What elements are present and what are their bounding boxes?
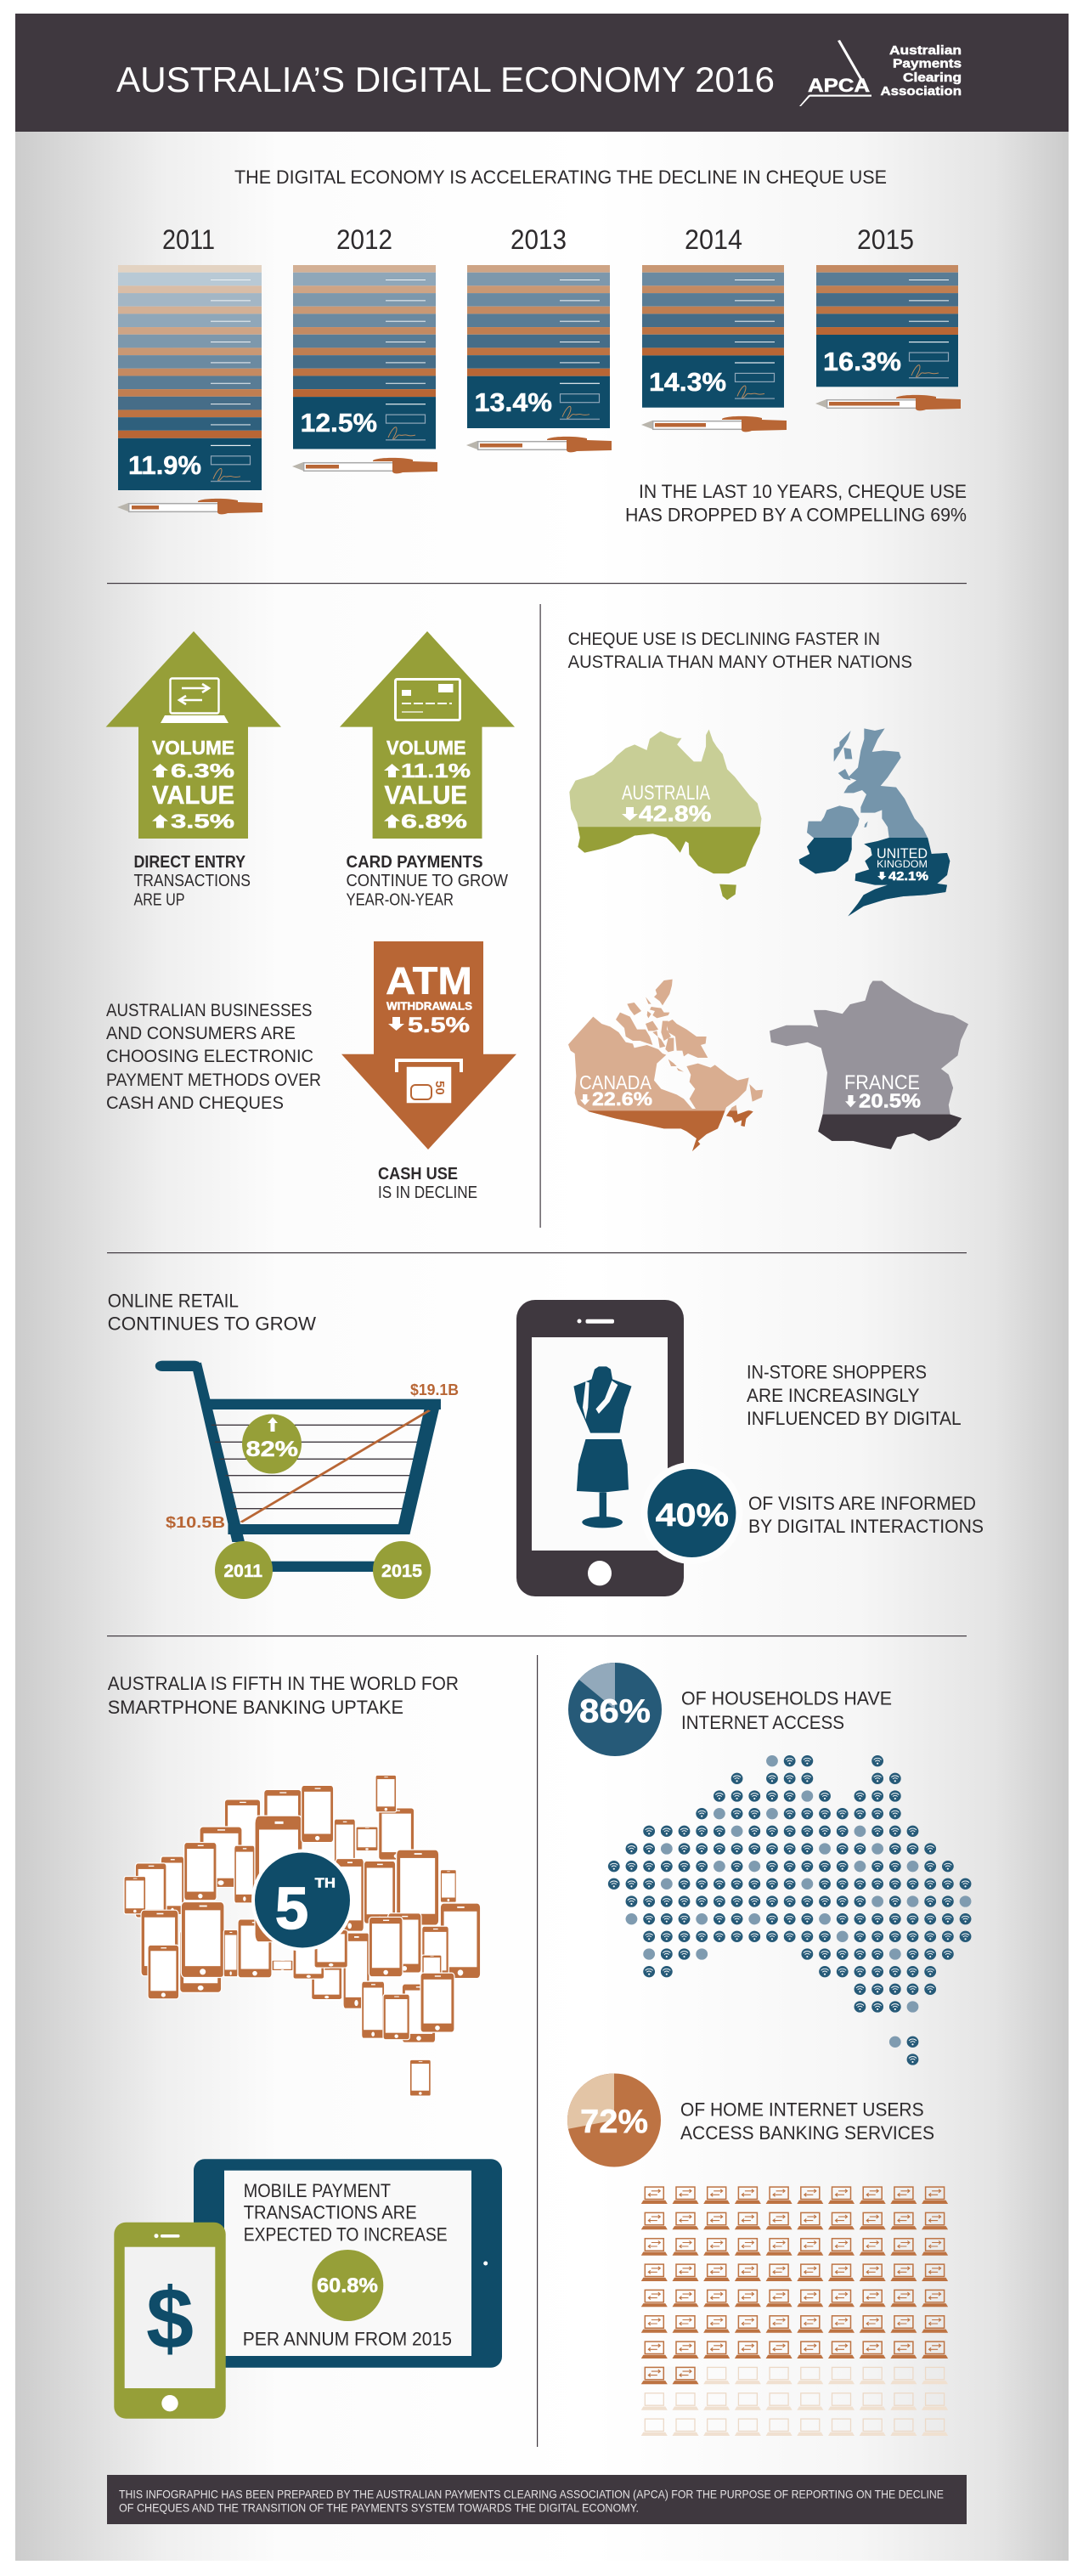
arrow: direct entry: VALUE (152, 780, 234, 810)
heading: smartphone banking: SMARTPHONE BANKING UPTAKE (108, 1697, 403, 1718)
text: businesses and consumers: CHOOSING ELECTRONIC (106, 1047, 313, 1066)
arrow: ATM withdrawals: WITHDRAWALS (386, 999, 472, 1013)
APCA logo (799, 40, 962, 106)
map: Australia (569, 729, 761, 900)
arrow: ATM withdrawals (341, 941, 516, 1150)
text: cheque use dropped 69%: HAS DROPPED BY A COMPELLING 69% (625, 505, 967, 525)
caption: card payments: CONTINUE TO GROW (347, 872, 508, 890)
tablet and phone: mobile payments: MOBILE PAYMENT (244, 2180, 391, 2201)
wheel 2015: 2015 (381, 1562, 422, 1581)
icon: mannequin (573, 1366, 632, 1528)
tablet and phone: mobile payments (114, 2159, 502, 2419)
APCA logo: Payments (893, 56, 962, 71)
text: cheque use dropped 69%: IN THE LAST 10 YEARS, CHEQUE USE (639, 481, 967, 502)
year label 2015: 2015 (857, 224, 914, 255)
arrow: card payments: 11.1% (401, 760, 471, 782)
footer note: THIS INFOGRAPHIC HAS BEEN PREPARED BY THE AUSTRALIAN PAYMENTS CLEARING ASSOCIATION (APCA) FOR THE PURPOSE OF REPORTING ON THE DECLINE (119, 2488, 944, 2501)
pen (466, 437, 612, 452)
title: AUSTRALIA’S DIGITAL ECONOMY 2016 (116, 59, 775, 99)
arrow: card payments: 6.8% (401, 811, 467, 833)
pen (292, 458, 437, 473)
pen (117, 499, 262, 514)
text: businesses and consumers: AND CONSUMERS ARE (106, 1024, 296, 1043)
text: households internet access: INTERNET ACCESS (681, 1712, 844, 1733)
caption: cash use: IS IN DECLINE (378, 1183, 477, 1202)
arrow: direct entry (106, 631, 281, 839)
callout: 60.8%: 60.8% (317, 2274, 378, 2297)
map: Australia made of smartphones (124, 1775, 481, 2096)
arrow: direct entry: 3.5% (171, 811, 234, 833)
pen (641, 416, 787, 432)
caption: cash use: CASH USE (378, 1165, 458, 1183)
phone with mannequin (516, 1300, 742, 1596)
callout: 60.8% (312, 2250, 383, 2321)
map: United Kingdom: UNITED (877, 845, 928, 861)
tablet and phone: mobile payments: TRANSACTIONS ARE (244, 2202, 417, 2223)
cheque stack 2011 (117, 224, 262, 514)
text: in-store shoppers: INFLUENCED BY DIGITAL (747, 1408, 962, 1429)
footer note: OF CHEQUES AND THE TRANSITION OF THE PAYMENTS SYSTEM TOWARDS THE DIGITAL ECONOMY. (119, 2501, 639, 2515)
map: Australia made of wifi dots (608, 1755, 971, 2065)
heading: online retail: ONLINE RETAIL (108, 1291, 239, 1312)
APCA logo: Australian (889, 43, 962, 58)
text: visits informed: OF VISITS ARE INFORMED (748, 1493, 976, 1514)
caption: card payments (347, 853, 508, 909)
pie: 72% banking: 72% (580, 2104, 648, 2140)
heading: cheque use by nation (568, 630, 912, 672)
callout: 82%: 82% (246, 1438, 298, 1461)
icon: card (396, 680, 460, 720)
callout: 40% (640, 1462, 742, 1564)
map: United Kingdom: KINGDOM (877, 858, 928, 870)
text: home internet users: OF HOME INTERNET USERS (680, 2099, 924, 2121)
caption: direct entry: DIRECT ENTRY (134, 853, 246, 872)
year label 2014: 2014 (685, 224, 742, 255)
map: France (770, 980, 968, 1150)
map: Canada (568, 980, 763, 1151)
arrow: card payments: VALUE (384, 780, 467, 810)
icon: laptop (161, 678, 228, 723)
callout: 5th: TH (315, 1876, 336, 1891)
map: United Kingdom (799, 728, 950, 916)
text: home internet users (680, 2099, 934, 2144)
percentage 13.4%: 13.4% (474, 387, 552, 417)
text: in-store shoppers: IN-STORE SHOPPERS (747, 1362, 927, 1383)
map: France: FRANCE (844, 1071, 920, 1094)
map: United Kingdom: 42.1% (888, 869, 928, 884)
cheque stack 2015 (815, 224, 961, 410)
icon: phone with dollar: $ (146, 2270, 194, 2367)
icon: cash machine: 50 (432, 1081, 447, 1095)
text: businesses and consumers: AUSTRALIAN BUSINESSES (106, 1001, 313, 1020)
chart: shopping cart (155, 1361, 459, 1599)
text: visits informed (748, 1493, 984, 1537)
percentage 12.5%: 12.5% (301, 408, 377, 438)
cheque stack 2014 (641, 224, 787, 432)
icon: cash machine (397, 1060, 461, 1104)
heading: online retail: CONTINUES TO GROW (108, 1313, 316, 1335)
heading: cheque use by nation: AUSTRALIA THAN MANY OTHER NATIONS (568, 652, 912, 672)
text: in-store shoppers (747, 1362, 962, 1429)
arrow: ATM withdrawals: ATM (386, 959, 472, 1003)
footer note (107, 2475, 967, 2524)
text: in-store shoppers: ARE INCREASINGLY (747, 1385, 920, 1406)
APCA logo: APCA (808, 75, 870, 96)
grid: laptops 72 of 100 (641, 2187, 948, 2436)
text: visits informed: BY DIGITAL INTERACTIONS (748, 1516, 984, 1537)
text: cheque use dropped 69% (625, 481, 967, 525)
map: Australia: 42.8% (639, 800, 712, 826)
tablet and phone: mobile payments: PER ANNUM FROM 2015 (243, 2329, 452, 2350)
wheel 2011: 2011 (224, 1562, 262, 1581)
arrow: direct entry: 6.3% (171, 760, 234, 782)
caption: direct entry: TRANSACTIONS (134, 872, 251, 890)
text: businesses and consumers: CASH AND CHEQUES (106, 1093, 284, 1113)
text: businesses and consumers (106, 1001, 321, 1113)
map: Australia: AUSTRALIA (622, 782, 710, 805)
year label 2013: 2013 (510, 224, 567, 255)
APCA logo: Association (880, 84, 962, 99)
pie: 86% households (568, 1663, 662, 1756)
pie: 86% households: 86% (579, 1693, 651, 1730)
APCA logo: Clearing (903, 71, 962, 85)
section heading: cheque decline: THE DIGITAL ECONOMY IS ACCELERATING THE DECLINE IN CHEQUE USE (234, 167, 887, 188)
chart: shopping cart: $10.5B (166, 1514, 225, 1531)
year label 2012: 2012 (336, 224, 392, 255)
percentage 16.3%: 16.3% (823, 347, 901, 376)
callout: 5th: 5 (275, 1875, 308, 1941)
chart: shopping cart: $19.1B (410, 1381, 459, 1398)
callout: 82% (242, 1414, 302, 1473)
caption: card payments: YEAR-ON-YEAR (347, 890, 454, 909)
text: households internet access (681, 1688, 892, 1733)
arrow: card payments (340, 631, 515, 839)
caption: direct entry (134, 853, 251, 909)
arrow: direct entry: VOLUME (152, 737, 234, 759)
percentage 11.9%: 11.9% (128, 450, 201, 480)
text: businesses and consumers: PAYMENT METHODS OVER (106, 1071, 321, 1090)
percentage 14.3%: 14.3% (649, 367, 726, 397)
heading: online retail (108, 1291, 316, 1335)
header band (15, 14, 1069, 132)
arrow: card payments: VOLUME (386, 737, 466, 759)
arrow: ATM withdrawals: 5.5% (408, 1014, 470, 1037)
icon: phone with dollar (114, 2223, 226, 2419)
callout: 40%: 40% (656, 1498, 729, 1534)
heading: smartphone banking: AUSTRALIA IS FIFTH IN THE WORLD FOR (108, 1673, 459, 1694)
caption: direct entry: ARE UP (134, 890, 185, 909)
wheel 2015 (373, 1541, 431, 1599)
map: Canada: CANADA (579, 1071, 652, 1093)
tablet and phone: mobile payments: EXPECTED TO INCREASE (244, 2223, 448, 2245)
map: Canada: 22.6% (592, 1088, 652, 1110)
pie: 72% banking (567, 2073, 661, 2166)
cheque stack 2012 (292, 224, 437, 473)
caption: card payments: CARD PAYMENTS (347, 853, 482, 872)
pen (815, 395, 961, 410)
text: households internet access: OF HOUSEHOLDS HAVE (681, 1688, 892, 1709)
caption: cash use (378, 1165, 477, 1202)
text: home internet users: ACCESS BANKING SERVICES (680, 2122, 934, 2144)
callout: 5th (251, 1849, 353, 1951)
map: France: 20.5% (859, 1089, 921, 1111)
year label 2011: 2011 (162, 224, 215, 255)
heading: cheque use by nation: CHEQUE USE IS DECLINING FASTER IN (568, 630, 880, 649)
cheque stack 2013 (466, 224, 612, 452)
heading: smartphone banking (108, 1673, 459, 1718)
wheel 2011 (215, 1541, 273, 1599)
